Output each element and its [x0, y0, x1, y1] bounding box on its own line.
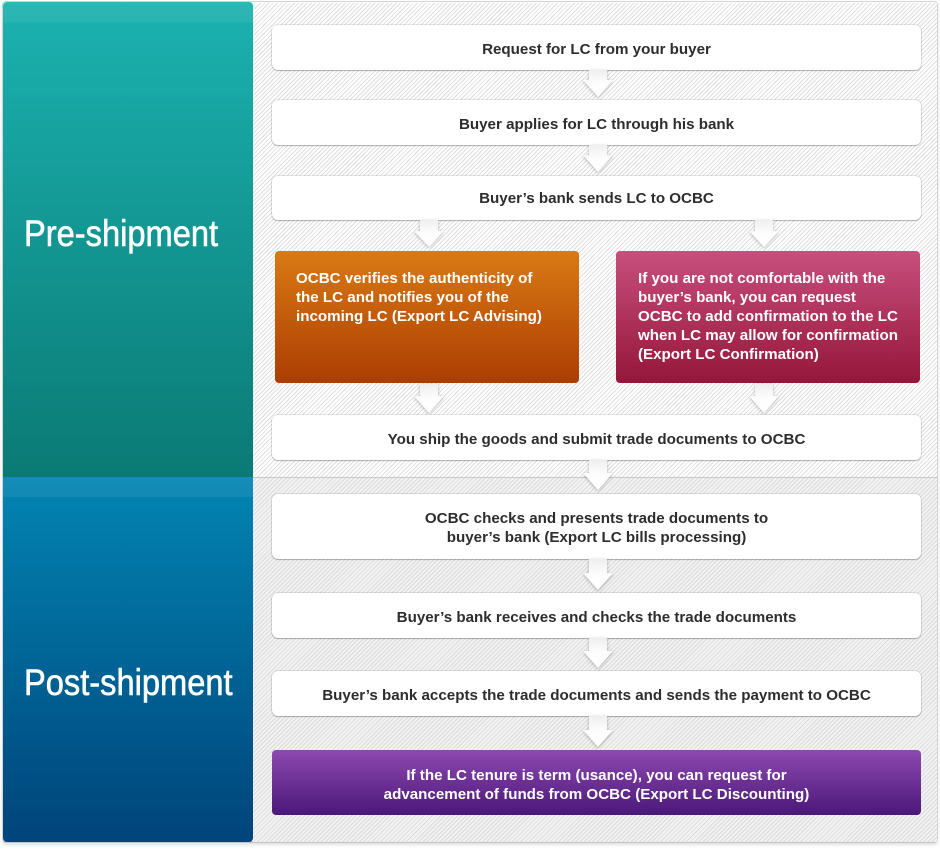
step: OCBC checks documents: buyer’s bank (Export LC bills processing)	[447, 528, 746, 546]
arrow left merge	[414, 383, 444, 415]
arrow across phases	[582, 459, 614, 492]
step: ship goods: You ship the goods and submit trade documents to OCBC	[388, 430, 805, 448]
step: buyer's bank receives: Buyer’s bank receives and checks the trade documents	[397, 608, 796, 626]
callout: export LC discounting	[272, 750, 921, 815]
arrow left branch	[414, 219, 444, 249]
callout: export LC advising: OCBC verifies the authenticity of	[296, 270, 532, 287]
step: buyer's bank sends LC: Buyer’s bank sends LC to OCBC	[479, 190, 714, 207]
callout: export LC confirmation: (Export LC Confirmation)	[638, 346, 819, 363]
arrow	[582, 558, 614, 592]
callout: export LC confirmation	[616, 251, 920, 383]
arrow	[582, 144, 614, 174]
callout: export LC confirmation: OCBC to add confirmation to the LC	[638, 308, 898, 325]
step: buyer's bank receives	[272, 593, 921, 638]
callout: export LC confirmation: when LC may allow for confirmation	[638, 327, 898, 344]
arrow	[582, 637, 614, 670]
panel: pre-shipment heading	[3, 2, 253, 477]
panel: post-shipment background	[253, 477, 937, 842]
callout: export LC confirmation: buyer’s bank, you can request	[638, 289, 856, 306]
step: ship goods	[272, 415, 921, 460]
panel: pre-shipment heading: Pre-shipment	[24, 213, 218, 254]
arrow right merge	[748, 383, 780, 415]
step: buyer applies	[272, 100, 921, 145]
panel: post-shipment heading	[3, 477, 253, 842]
callout: export LC discounting: If the LC tenure is term (usance), you can request for	[406, 766, 787, 784]
callout: export LC discounting: advancement of funds from OCBC (Export LC Discounting)	[384, 786, 809, 802]
arrow right branch	[748, 219, 780, 249]
step: request for LC: Request for LC from your buyer	[482, 40, 711, 58]
panel: post-shipment heading: Post-shipment	[24, 662, 233, 703]
arrow	[582, 715, 614, 749]
arrow	[582, 69, 614, 99]
step: request for LC	[272, 25, 921, 70]
step: buyer's bank accepts: Buyer’s bank accepts the trade documents and sends the payment to OCBC	[322, 686, 871, 704]
callout: export LC confirmation: If you are not comfortable with the	[638, 270, 885, 287]
step: OCBC checks documents	[272, 494, 921, 559]
callout: export LC advising: the LC and notifies you of the	[296, 289, 509, 306]
step: OCBC checks documents: OCBC checks and presents trade documents to	[425, 510, 768, 526]
step: buyer's bank sends LC	[272, 176, 921, 220]
step: buyer's bank accepts	[272, 671, 921, 716]
step: buyer applies: Buyer applies for LC through his bank	[459, 116, 734, 132]
panel: pre-shipment background	[253, 3, 937, 477]
callout: export LC advising: incoming LC (Export LC Advising)	[296, 308, 542, 325]
callout: export LC advising	[275, 251, 579, 383]
